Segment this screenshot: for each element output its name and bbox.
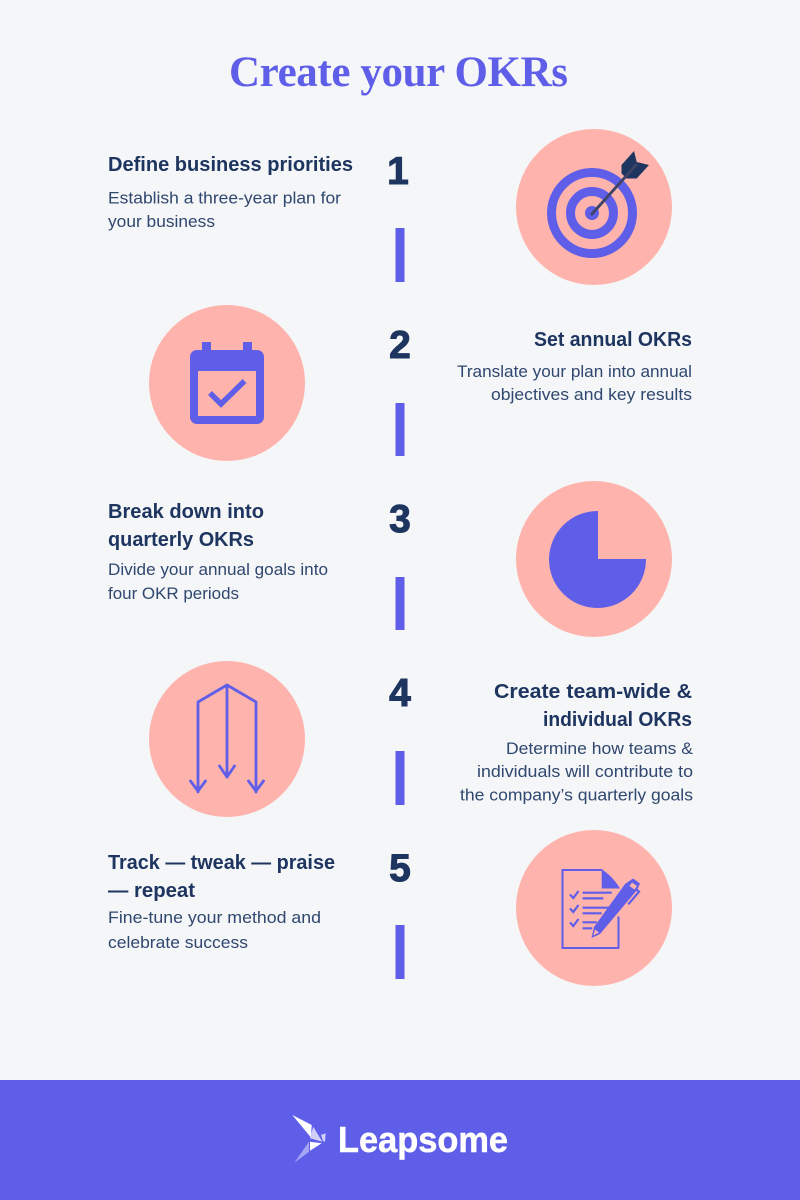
logo bird mark bbox=[292, 1115, 326, 1163]
step 4 text: individual OKRs bbox=[543, 709, 692, 731]
step 3 text: four OKR periods bbox=[108, 585, 239, 603]
step 2 text: Set annual OKRs bbox=[534, 329, 692, 351]
step 2 text: objectives and key results bbox=[491, 386, 692, 404]
step 4 text: the company’s quarterly goals bbox=[460, 786, 693, 804]
step 5 connector bbox=[396, 925, 404, 979]
step 3 text bbox=[108, 501, 328, 603]
step 3 icon: pie chart bbox=[516, 481, 672, 637]
step 2 bbox=[149, 305, 692, 461]
footer band bbox=[0, 1080, 800, 1200]
step 2 icon: calendar bbox=[149, 305, 305, 461]
step 2 text: Translate your plan into annual bbox=[457, 363, 692, 381]
step 3 bbox=[108, 481, 672, 637]
step 5 text: — repeat bbox=[108, 880, 195, 902]
logo: Leapsome bbox=[292, 1115, 508, 1163]
step 4 text bbox=[460, 681, 693, 804]
step 3 text: quarterly OKRs bbox=[108, 529, 254, 551]
step 3 number: 3 bbox=[389, 498, 411, 541]
step 2 number: 2 bbox=[389, 324, 411, 367]
step 4 connector bbox=[396, 751, 404, 805]
step 4 number: 4 bbox=[389, 672, 411, 715]
logo wordmark: Leapsome bbox=[338, 1119, 508, 1160]
step 4 bbox=[149, 661, 693, 817]
step 1 connector bbox=[396, 228, 404, 282]
step 2 connector bbox=[396, 403, 404, 456]
step 1 bbox=[108, 129, 672, 285]
step 5 number: 5 bbox=[389, 847, 411, 890]
step 2 text bbox=[457, 329, 692, 404]
step 3 connector bbox=[396, 577, 404, 630]
step 1 text: Define business priorities bbox=[108, 154, 353, 176]
step 1 text: Establish a three-year plan for bbox=[108, 190, 342, 208]
step 1 number: 1 bbox=[387, 150, 409, 193]
step 4 text: individuals will contribute to bbox=[477, 763, 693, 781]
step 1 text bbox=[108, 154, 353, 231]
step 1 text: your business bbox=[108, 213, 215, 231]
step 5 text: Fine-tune your method and bbox=[108, 909, 321, 927]
step 5 text: Track — tweak — praise bbox=[108, 852, 335, 874]
step 3 text: Divide your annual goals into bbox=[108, 561, 328, 579]
title: Create your OKRs bbox=[229, 49, 568, 96]
step 1 icon: target and dart bbox=[516, 129, 672, 285]
step 5 icon: checklist and pen bbox=[516, 830, 672, 986]
step 5 text bbox=[108, 852, 335, 952]
step 4 text: Create team-wide & bbox=[494, 681, 692, 703]
step 5 text: celebrate success bbox=[108, 934, 248, 952]
step 4 icon: cascading arrows bbox=[149, 661, 305, 817]
step 5 bbox=[108, 830, 672, 986]
step 3 text: Break down into bbox=[108, 501, 264, 523]
step 4 text: Determine how teams & bbox=[506, 740, 693, 758]
